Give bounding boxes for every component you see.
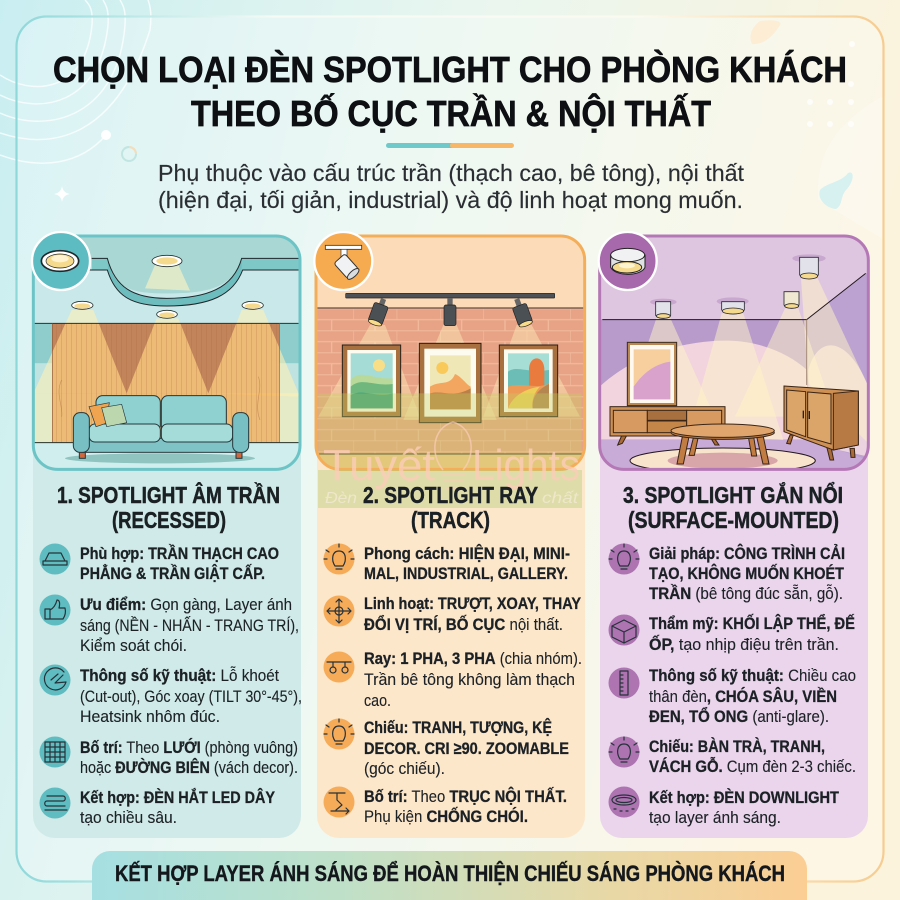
panel background teal	[33, 300, 301, 838]
item: ray: Ray: 1 PHA, 3 PHA (chia nhóm).	[364, 649, 582, 668]
background decoration	[0, 0, 885, 240]
item: thông số: ĐEN, TỔ ONG (anti-glare).	[649, 707, 829, 726]
item: chiếu: VÁCH GỖ. Cụm đèn 2-3 chiếc.	[649, 757, 856, 776]
beams	[648, 278, 867, 442]
heading: surface-mounted: 3. SPOTLIGHT GẮN NỔI	[623, 481, 843, 508]
item: ưu điểm	[40, 594, 299, 655]
painting left	[342, 345, 401, 417]
item: thông số	[608, 666, 856, 726]
item: thẩm mỹ	[608, 613, 855, 654]
item: linh hoạt: Linh hoạt: TRƯỢT, XOAY, THAY	[364, 594, 582, 613]
item: kết hợp: Kết hợp: ĐÈN DOWNLIGHT	[649, 788, 840, 807]
item: giải pháp: Giải pháp: CÔNG TRÌNH CẢI	[649, 544, 845, 563]
item: kết hợp	[40, 788, 276, 827]
item: thông số: Thông số kỹ thuật: Lỗ khoét	[80, 666, 279, 685]
item: thẩm mỹ: Thẩm mỹ: KHỐI LẬP THỂ, ĐẾ	[649, 613, 855, 633]
track rail	[346, 293, 555, 298]
item: bố trí: hoặc ĐƯỜNG BIÊN (vách decor).	[80, 758, 298, 777]
icon badge: track light	[314, 232, 372, 290]
watermark: brand: Tuyết	[323, 441, 435, 490]
item: thông số: (Cut-out), Góc xoay (TILT 30°-45°),	[80, 687, 302, 706]
title underline	[386, 143, 514, 148]
list: recessed details	[40, 544, 302, 827]
item: ray: Trần bê tông không làm thạch	[364, 670, 575, 689]
item: chiếu: DECOR. CRI ≥90. ZOOMABLE	[364, 739, 569, 758]
item: giải pháp	[608, 544, 845, 603]
list: surface-mounted details	[608, 544, 856, 827]
cabinet	[784, 386, 858, 460]
item: ưu điểm: sáng (NỀN - NHẤN - TRANG TRÍ),	[80, 616, 299, 635]
subtitle: (hiện đại, tối giản, industrial) và độ linh hoạt mong muốn.	[158, 187, 743, 213]
item: thông số: thân đèn, CHÓA SÂU, VIỀN	[649, 687, 837, 706]
sofa	[65, 396, 255, 463]
item: ray	[324, 649, 582, 710]
item: kết hợp	[608, 786, 840, 827]
item: phong cách: Phong cách: HIỆN ĐẠI, MINI-	[364, 544, 570, 563]
panel: surface-mounted spotlight	[599, 232, 868, 838]
heading: surface-mounted: (SURFACE-MOUNTED)	[628, 507, 839, 533]
item: ưu điểm: Ưu điểm: Gọn gàng, Layer ánh	[80, 595, 292, 614]
heading: track: (TRACK)	[411, 507, 490, 533]
panel: track spotlight	[314, 232, 585, 838]
heading: track: 2. SPOTLIGHT RAY	[363, 482, 538, 508]
footer banner	[92, 851, 807, 900]
framed art	[627, 342, 677, 406]
watermark: brand: Đèn	[325, 490, 357, 507]
light beams	[318, 325, 580, 420]
item: phong cách	[324, 544, 570, 583]
scene: surface lamps over furniture	[599, 232, 868, 473]
painting right	[499, 345, 558, 417]
item: chiếu: Chiếu: BÀN TRÀ, TRANH,	[649, 737, 825, 756]
coffee table	[671, 424, 774, 464]
item: chiếu: (góc chiếu).	[364, 759, 445, 778]
title	[53, 48, 847, 134]
painting center	[419, 343, 481, 423]
item: chiếu	[608, 736, 856, 776]
item: bố trí	[324, 786, 567, 826]
item: linh hoạt: ĐỔI VỊ TRÍ, BỐ CỤC nội thất.	[364, 614, 563, 634]
surface lamps	[650, 254, 826, 318]
item: phù hợp: PHẲNG & TRẦN GIẬT CẤP.	[80, 564, 265, 583]
watermark: brand: Lights	[472, 441, 580, 490]
rug	[630, 448, 816, 468]
scene: track lights over brick wall gallery	[314, 232, 585, 472]
watermark: brand	[318, 422, 582, 508]
heading: recessed: 1. SPOTLIGHT ÂM TRẦN	[57, 481, 280, 508]
item: giải pháp: TRẦN (bê tông đúc sẵn, gỗ).	[649, 584, 843, 603]
item: bố trí: Phụ kiện CHỐNG CHÓI.	[364, 806, 528, 826]
item: thông số: Heatsink nhôm đúc.	[80, 707, 220, 726]
item: thông số: Thông số kỹ thuật: Chiều cao	[649, 666, 856, 685]
item: chiếu	[324, 718, 569, 778]
item: thẩm mỹ: ỐP, tạo nhịp điệu trên trần.	[649, 634, 839, 654]
watermark: brand: chất	[542, 490, 579, 507]
watermark tint inside scene	[318, 393, 582, 472]
item: bố trí	[40, 736, 298, 777]
item: bố trí: Bố trí: Theo LƯỚI (phòng vuông)	[80, 738, 298, 757]
item: ray: cao.	[364, 691, 391, 710]
item: kết hợp: tạo chiều sâu.	[80, 808, 177, 827]
recessed lamps	[72, 255, 263, 318]
item: ưu điểm: Kiểm soát chói.	[80, 636, 187, 655]
item: phù hợp	[40, 544, 279, 583]
track heads	[367, 296, 533, 328]
heading: track	[363, 482, 538, 533]
item: kết hợp: tạo layer ánh sáng.	[649, 808, 781, 827]
panel background orange	[317, 300, 585, 838]
panel: recessed spotlight	[32, 232, 302, 838]
scene: recessed ceiling living room	[32, 232, 300, 470]
item: giải pháp: TẠO, KHÔNG MUỐN KHOÉT	[649, 563, 845, 583]
item: kết hợp: Kết hợp: ĐÈN HẮT LED DÂY	[80, 788, 276, 807]
heading: recessed: (RECESSED)	[112, 507, 226, 533]
footer banner: KẾT HỢP LAYER ÁNH SÁNG ĐỂ HOÀN THIỆN CHIẾU SÁNG PHÒNG KHÁCH	[115, 861, 785, 886]
subtitle: Phụ thuộc vào cấu trúc trần (thạch cao, bê tông), nội thất	[158, 160, 745, 186]
icon badge: surface lamp	[599, 232, 657, 290]
list: track details	[324, 544, 582, 826]
icon badge: recessed lamp	[32, 232, 90, 290]
item: phong cách: MAL, INDUSTRIAL, GALLERY.	[364, 564, 568, 583]
title: THEO BỐ CỤC TRẦN & NỘI THẤT	[191, 92, 711, 134]
item: thông số	[40, 664, 302, 726]
item: bố trí: Bố trí: Theo TRỤC NỘI THẤT.	[364, 787, 567, 806]
panel background purple	[600, 300, 868, 838]
subtitle	[158, 160, 745, 213]
heading: surface-mounted	[623, 481, 843, 533]
item: chiếu: Chiếu: TRANH, TƯỢNG, KỆ	[364, 718, 552, 737]
heading: recessed	[57, 481, 280, 533]
item: linh hoạt	[324, 594, 582, 634]
item: phù hợp: Phù hợp: TRẦN THẠCH CAO	[80, 544, 279, 563]
console	[610, 407, 725, 445]
